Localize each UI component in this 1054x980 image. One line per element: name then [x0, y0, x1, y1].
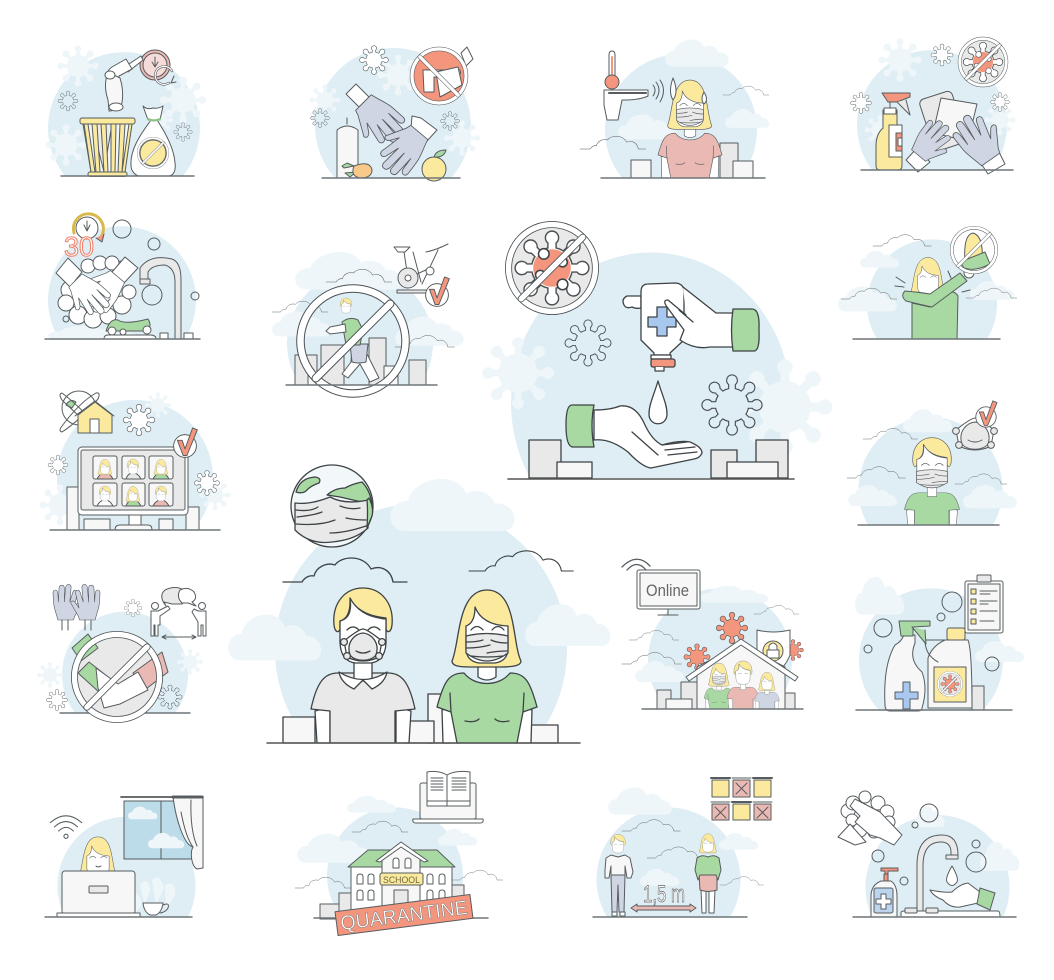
icon: buildings [320, 885, 471, 919]
panel: wear a mask man [847, 401, 1017, 525]
icon: buildings [295, 338, 426, 385]
icon: phone and wipe [918, 90, 977, 152]
panel: cleaning products [855, 575, 1024, 711]
icon: check mark [976, 401, 997, 427]
icon: bubbles [864, 592, 999, 671]
figure: woman with mask [658, 80, 722, 178]
icon: soap pump [871, 868, 898, 917]
panel: social distance 1.5 m [593, 778, 772, 917]
banner: quarantine [335, 894, 473, 936]
figure: woman with surgical mask [437, 590, 537, 743]
panel: no running outside, exercise bike [272, 244, 464, 394]
arrow: distance [631, 904, 696, 912]
icon: buildings [529, 440, 788, 478]
icon: viruses [311, 46, 459, 130]
panel: disinfect phone [851, 38, 1015, 174]
icon: receiving hand [566, 405, 702, 468]
tile grid: video participants [93, 456, 173, 506]
icon: wifi [50, 816, 82, 838]
icon: gloves [53, 585, 100, 630]
text: distance label: 1,5 m [643, 881, 685, 908]
figure: sneezing woman [895, 258, 974, 339]
icon: garbage bag with ban sign [131, 106, 175, 176]
panel: stay home online [622, 559, 803, 709]
icon: viruses [58, 91, 192, 141]
text: school sign: SCHOOL [383, 875, 420, 886]
panel: discard gloves in bag [45, 45, 206, 177]
icon: clipboard [965, 575, 1003, 633]
icon: respirator mask [953, 418, 997, 450]
icon: banned handshake [72, 634, 168, 720]
icon: clock [140, 50, 176, 84]
icon: prohibition ring [300, 288, 406, 394]
icon: bubbles [63, 220, 199, 322]
figure: standing woman [695, 834, 721, 913]
icon: lower glove [369, 116, 437, 182]
icon: banned virus [509, 225, 595, 311]
text: online: Online [646, 581, 689, 600]
icon: upper glove [346, 84, 412, 155]
icon: plant shadow [130, 877, 175, 912]
icon: banned virus [960, 39, 1006, 85]
icon: faucet [901, 835, 1000, 917]
icon: online monitor [622, 559, 700, 615]
icon: soap dish [104, 319, 156, 339]
icon: thermometer gun [604, 51, 664, 120]
figure: family [704, 661, 779, 709]
icon: laptop [57, 871, 140, 917]
icon: banned sneeze [952, 228, 996, 272]
icon: monitor stand [115, 514, 152, 530]
icon: check mark [174, 428, 197, 457]
icon: seat grid [711, 778, 772, 820]
icon: sanitizer bottle and hand [623, 283, 759, 371]
icon: apple [422, 150, 446, 181]
panel: wash hands with soap [838, 791, 1019, 917]
icon: sanitizer drop [649, 381, 667, 424]
icon: spray bottle [876, 93, 910, 170]
icon: shield with lock [757, 630, 790, 675]
icon: virus small [565, 320, 611, 366]
icon: gloved hands [906, 105, 1010, 174]
text: quarantine: QUARANTINE [339, 897, 469, 935]
icon: faucet [140, 258, 193, 339]
icon: carrot [342, 163, 372, 178]
text: 30 seconds: 30 [64, 231, 94, 262]
panel: hand sanitizer [482, 225, 832, 479]
panel: temperature check [580, 39, 769, 178]
icon: monitor [78, 447, 188, 515]
icon: open hand with green cuff [930, 883, 995, 910]
icon: buildings [631, 143, 753, 178]
icon: bubbles [872, 804, 986, 885]
icon: small building [972, 686, 984, 710]
icon: globe wearing mask [291, 465, 373, 547]
icon: salmon viruses [684, 613, 803, 670]
icon: soapy hands [56, 256, 138, 328]
icon: milk carton [337, 118, 358, 178]
icon: virus large [703, 376, 761, 434]
icon: disinfectant jug [925, 628, 972, 708]
icon: coffee cup [143, 903, 168, 915]
icon: viruses [48, 405, 219, 495]
icon: globe and house [60, 391, 114, 433]
icon: timer [73, 214, 104, 242]
icon: online book on laptop [413, 771, 483, 823]
panel: work from home [45, 797, 203, 917]
panel: gloves do not protect food [310, 46, 480, 182]
icon: spray bottle [885, 621, 930, 711]
icon: school building [348, 842, 455, 913]
icon: check mark [426, 277, 449, 306]
icon: two people talking at distance [151, 588, 206, 639]
icon: buildings [657, 682, 795, 709]
icon: hand dropping glove [105, 56, 143, 111]
panel: couple wearing masks [228, 465, 610, 743]
icon: window with curtain [121, 797, 203, 869]
icon: water drop [947, 866, 957, 886]
icon: viruses [47, 685, 182, 710]
icon: soapy hand [838, 791, 902, 845]
icon: exercise bike [394, 244, 448, 293]
panel: wash hands 30 seconds [45, 214, 200, 339]
figure: standing man [605, 834, 633, 916]
icon: virus [124, 599, 142, 617]
icon: house [686, 639, 798, 709]
panel: sneeze into elbow [838, 228, 1017, 339]
icon: buildings [283, 694, 558, 743]
panel: online video meeting [39, 391, 230, 530]
figure: runner [326, 298, 379, 382]
figure: man with mask [904, 438, 960, 525]
figure: man with respirator [311, 588, 415, 743]
icon: banned door handle [412, 47, 473, 103]
icon: sweat drops [670, 78, 706, 104]
figure: girl behind laptop [79, 837, 116, 878]
icon: buildings [67, 487, 199, 530]
icon: waste basket [80, 118, 135, 176]
icon: viruses [851, 44, 1009, 113]
panel: school quarantine [295, 771, 503, 936]
panel: keep distance, no handshake [37, 585, 206, 720]
